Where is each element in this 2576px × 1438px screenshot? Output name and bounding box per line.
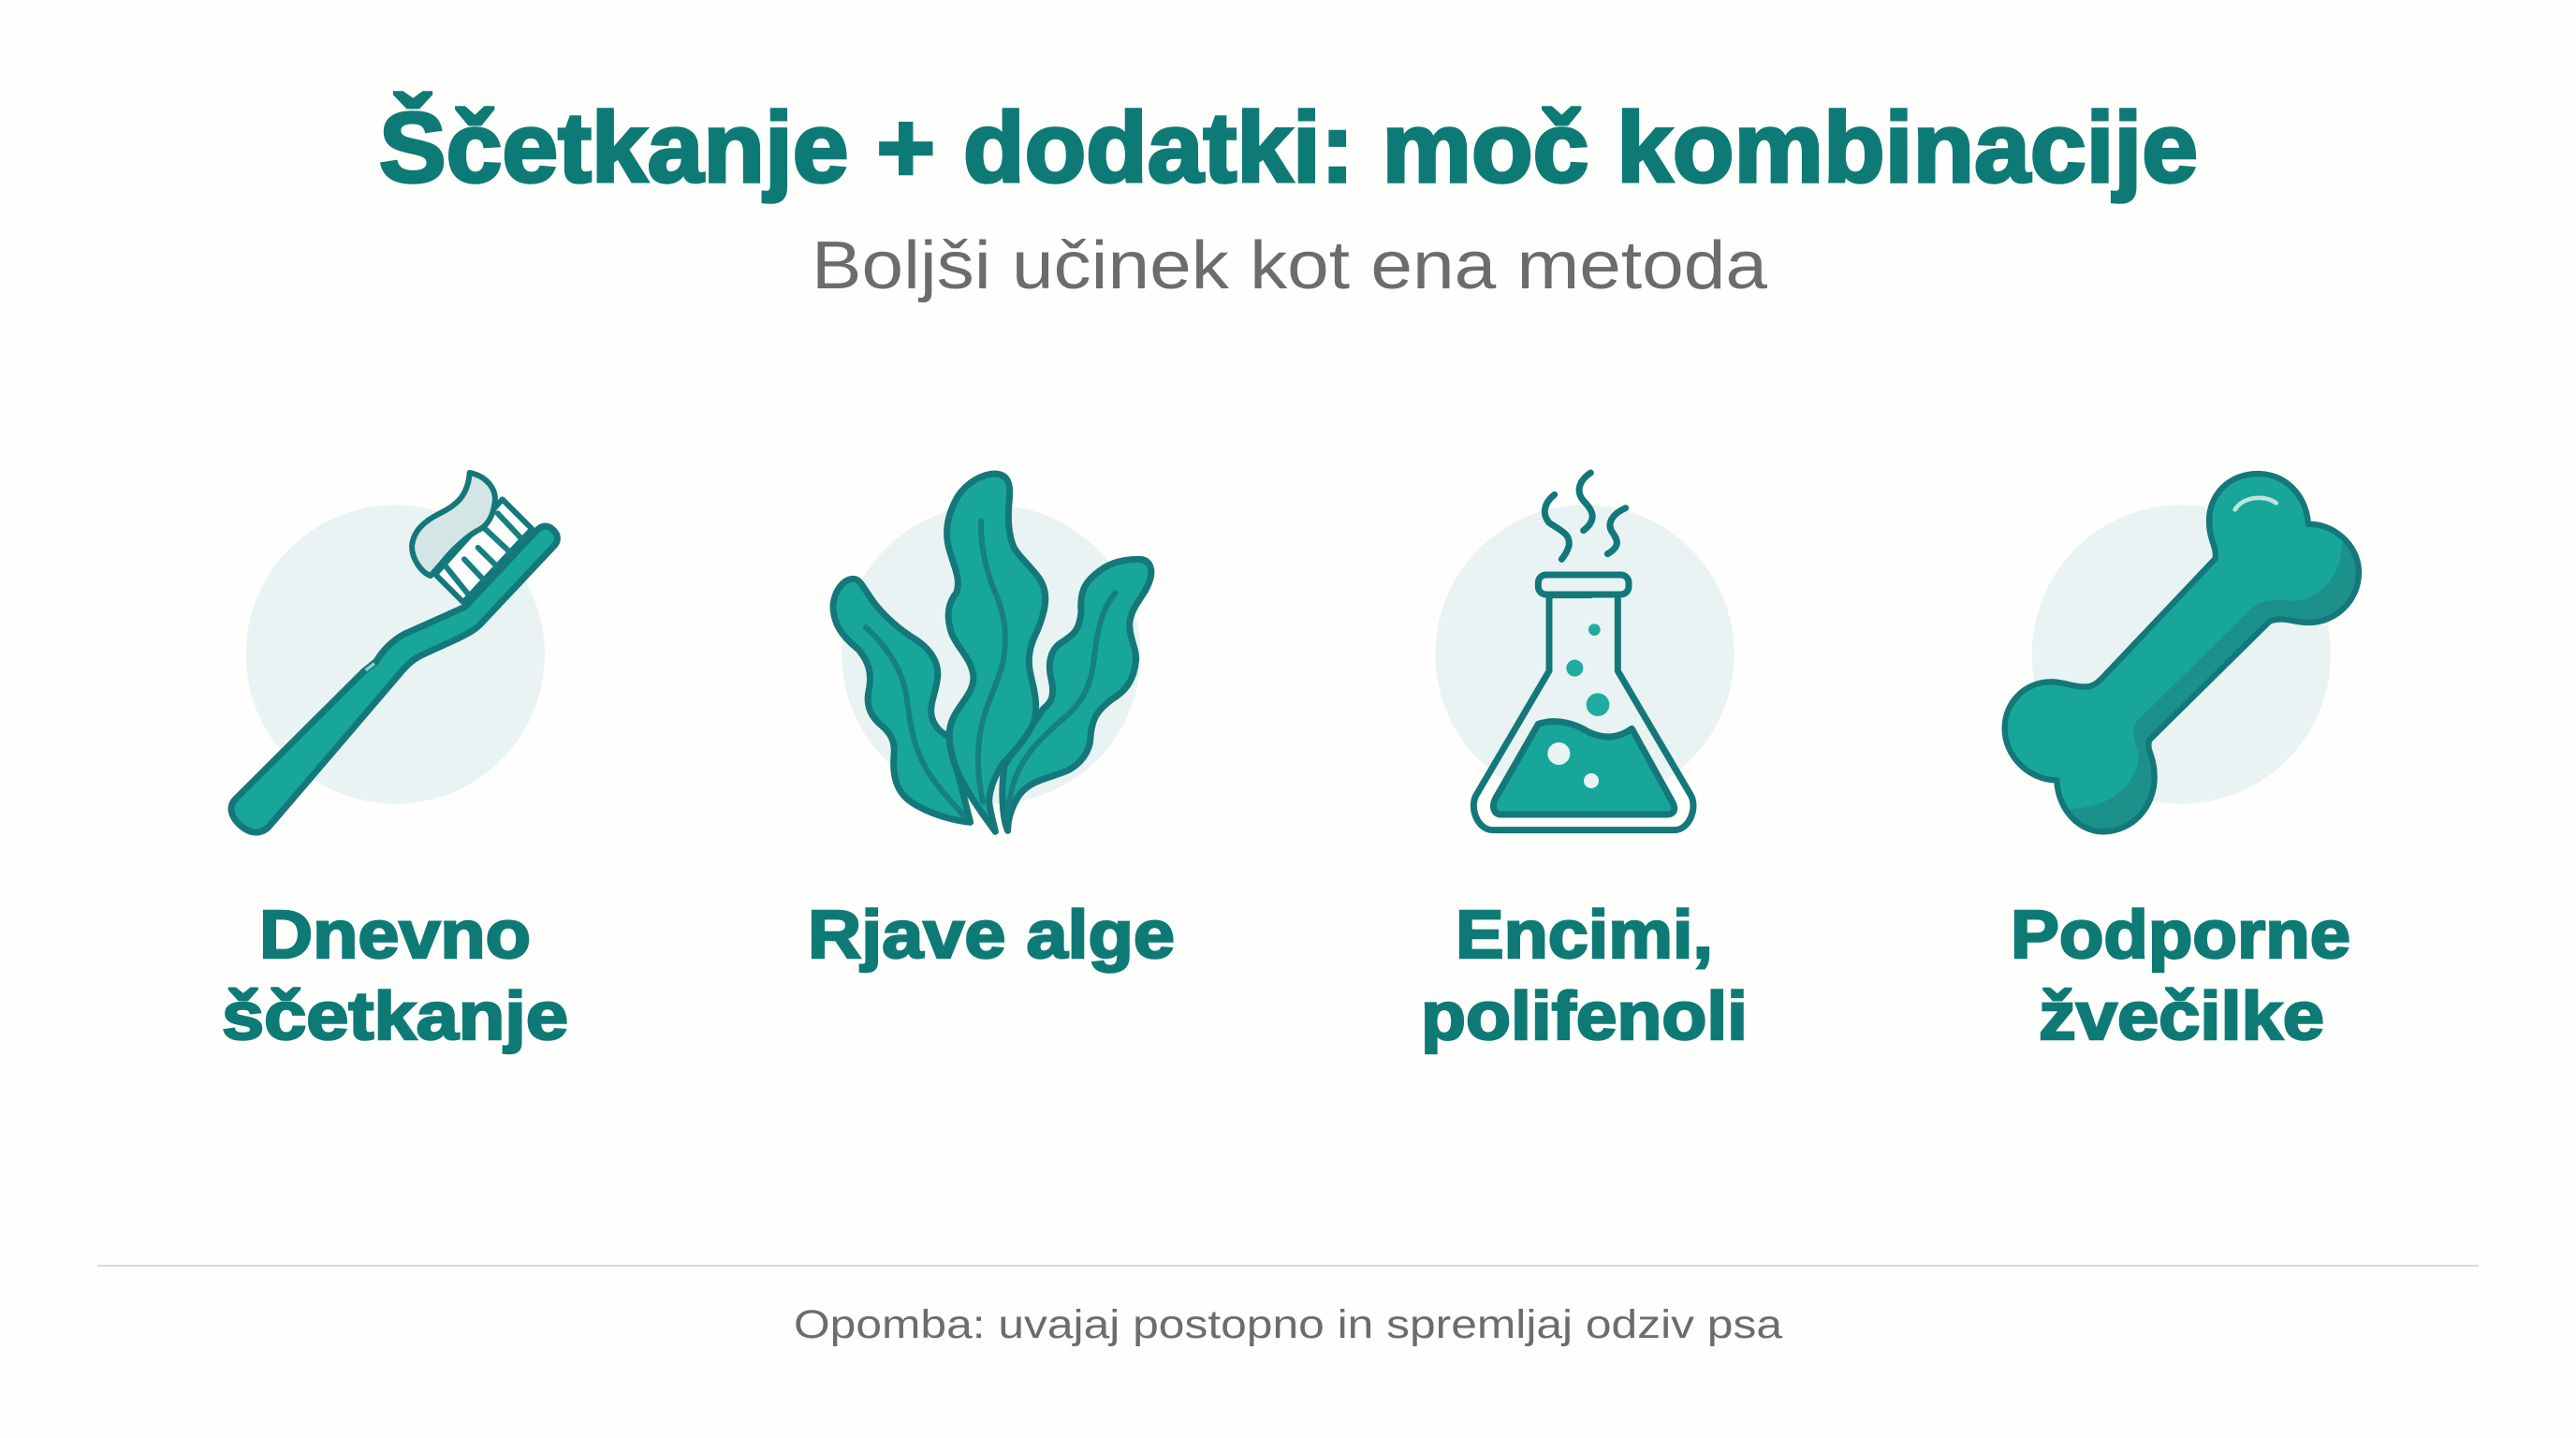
- label: Encimi, polifenoli: polifenoli: [1421, 979, 1748, 1054]
- footnote: Opomba: uvajaj postopno in spremljaj odziv psa: [794, 1302, 1782, 1347]
- icon: seaweed: [833, 474, 1151, 831]
- icon: flask: [1435, 473, 1734, 830]
- item: enzymes, polyphenols: [1421, 473, 1748, 1054]
- item: brown algae: [808, 474, 1175, 973]
- item: supportive chews: [2001, 470, 2363, 1041]
- label: Dnevno ščetkanje: ščetkanje: [222, 979, 568, 1054]
- label: Encimi, polifenoli: Encimi,: [1456, 898, 1713, 973]
- icon: toothbrush: [231, 473, 557, 832]
- subtitle: Boljši učinek kot ena metoda: [812, 228, 1768, 303]
- label: Rjave alge: Rjave alge: [808, 898, 1175, 973]
- label: Podporne žvečilke: Podporne: [2011, 898, 2350, 973]
- icon: bone: [2001, 470, 2363, 835]
- label: Dnevno ščetkanje: Dnevno: [259, 898, 531, 973]
- label: Podporne žvečilke: [2011, 898, 2350, 1054]
- label: Encimi, polifenoli: [1421, 898, 1748, 1054]
- item: daily brushing: [222, 473, 568, 1054]
- title: Ščetkanje + dodatki: moč kombinacije: [379, 93, 2198, 203]
- label: Podporne žvečilke: žvečilke: [2039, 979, 2324, 1054]
- label: Dnevno ščetkanje: [222, 898, 568, 1054]
